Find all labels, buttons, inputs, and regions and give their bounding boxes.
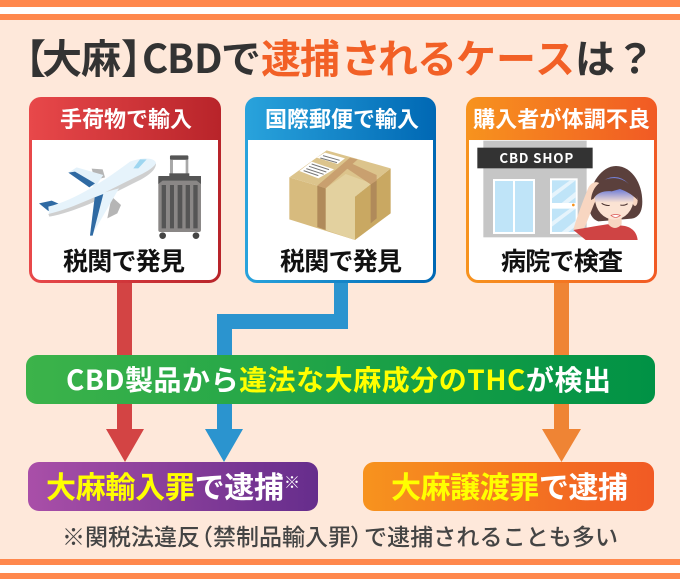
footnote: ） (350, 518, 373, 552)
panel label: hand luggage: 税関で発見 (63, 242, 185, 278)
footnote: ※関税法違反 (62, 518, 200, 552)
title: は？ (575, 27, 655, 85)
result box: cannabis import charge: 大麻輸入罪で逮捕 (46, 463, 284, 507)
panel: international mail (245, 97, 436, 283)
icon: suitcase (158, 155, 201, 239)
arrow: red, hand luggage to import charge (106, 280, 144, 462)
panel label: purchaser unwell: 病院で検査 (501, 242, 623, 278)
panel: purchaser unwell (466, 97, 657, 283)
icon: cardboard box (289, 150, 391, 240)
panel heading: international mail: 国際郵便で輸入 (265, 102, 419, 134)
icon: CBD shop (477, 141, 593, 237)
panel label: international mail: 税関で発見 (280, 242, 402, 278)
panel: hand luggage (29, 97, 221, 283)
footnote: （ (190, 518, 213, 552)
arrow: orange, purchaser to transfer charge (542, 280, 581, 462)
panel heading: hand luggage: 手荷物で輸入 (60, 102, 192, 134)
green banner: THC detected: CBD製品から違法な大麻成分のTHCが検出 (66, 359, 611, 399)
result box: cannabis transfer charge: 大麻譲渡罪で逮捕 (391, 463, 628, 507)
arrow: blue, international mail to import charge (205, 280, 348, 462)
icon: airplane (39, 158, 156, 236)
title: 逮捕されるケース (261, 27, 575, 85)
icon: unwell woman (573, 166, 642, 240)
icon: CBD shop: CBD SHOP (499, 148, 573, 167)
panel heading: purchaser unwell: 購入者が体調不良 (473, 102, 650, 134)
result box: cannabis import charge: ※ (284, 469, 300, 493)
footnote: 禁制品輸入罪 (213, 518, 351, 552)
footnote: で逮捕されることも多い (364, 518, 618, 552)
title (6, 27, 655, 85)
title: 【大麻】CBDで (6, 27, 261, 85)
